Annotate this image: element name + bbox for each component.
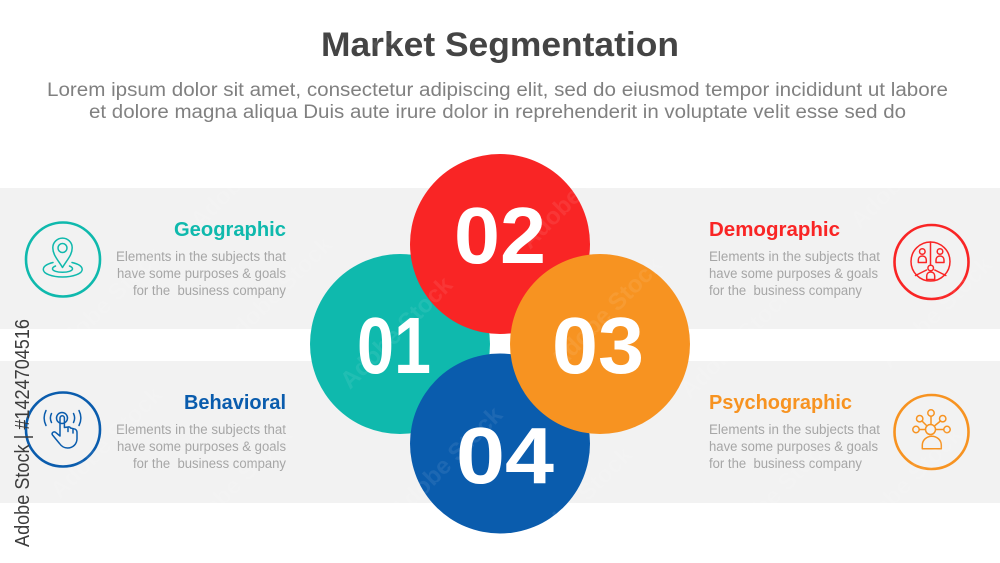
description: Geographic: have some purposes & goals: [117, 266, 286, 281]
panel: geographic: [26, 219, 286, 298]
description: Psychographic: Elements in the subjects that: [709, 422, 880, 437]
description: Behavioral: [116, 422, 286, 471]
watermark pattern: Adobe Stock: [845, 111, 968, 234]
icon: map pin: [26, 222, 100, 296]
description: Geographic: [116, 249, 286, 298]
description: Psychographic: have some purposes & goals: [709, 439, 878, 454]
circle 04: 04: [456, 411, 555, 500]
panel: demographic: [709, 219, 968, 299]
icon: people segments: [894, 225, 968, 299]
description: Demographic: have some purposes & goals: [709, 266, 878, 281]
panel: psychographic: [709, 392, 968, 471]
subtitle text: et dolore magna aliqua Duis aute irure dolor in reprehenderit in voluptate velit esse sed do: [89, 102, 906, 123]
watermark pattern: Adobe Stock: [515, 441, 638, 563]
watermark pattern: Adobe Stock: [515, 131, 638, 254]
description: Demographic: for the business company: [709, 283, 862, 298]
watermark pattern: Adobe Stock: [335, 271, 458, 394]
top background band: [0, 188, 1000, 329]
subtitle text: [47, 80, 948, 123]
description: Behavioral: Elements in the subjects that: [116, 422, 286, 437]
circle 03: 03: [552, 301, 644, 390]
circle 02: [410, 154, 590, 334]
watermark pattern: Adobe Stock: [175, 421, 298, 544]
circle 03: [510, 254, 690, 434]
watermark pattern: Adobe Stock: [375, 71, 498, 194]
watermark pattern: Adobe Stock: [185, 111, 308, 234]
watermark pattern: Adobe Stock: [715, 431, 838, 554]
watermark pattern: Adobe Stock: [215, 231, 338, 354]
circle 01: 01: [357, 301, 431, 390]
watermark pattern: Adobe Stock: [845, 421, 968, 544]
watermark pattern: Adobe Stock: [545, 251, 668, 374]
watermark pattern: Adobe Stock: [45, 241, 168, 364]
panel: behavioral: [26, 392, 286, 471]
heading: Geographic: Geographic: [174, 219, 286, 241]
description: Behavioral: have some purposes & goals: [117, 439, 286, 454]
heading: Behavioral: Behavioral: [184, 392, 286, 414]
watermark pattern: Adobe Stock: [705, 71, 828, 194]
circle 02: 02: [454, 191, 546, 280]
description: Psychographic: [709, 422, 880, 471]
watermark pattern: Adobe Stock: [875, 251, 998, 374]
title: Market Segmentation: [321, 26, 679, 64]
stock id side label: Adobe Stock | #1424704516: [12, 319, 34, 547]
icon: mind network: [894, 395, 968, 469]
watermark pattern: Adobe Stock: [385, 401, 508, 524]
heading: Psychographic: Psychographic: [709, 392, 852, 414]
heading: Demographic: Demographic: [709, 219, 840, 241]
description: Psychographic: for the business company: [709, 456, 862, 471]
description: Geographic: Elements in the subjects that: [116, 249, 286, 264]
subtitle text: Lorem ipsum dolor sit amet, consectetur adipiscing elit, sed do eiusmod tempor incididunt ut labore: [47, 80, 948, 101]
description: Demographic: [709, 249, 880, 298]
circle 04: [410, 354, 590, 534]
watermark pattern: Adobe Stock: [45, 381, 168, 504]
circle 01: [310, 254, 490, 434]
icon: tapping hand: [26, 392, 100, 466]
watermark pattern: Adobe Stock: [675, 281, 798, 404]
bottom background band: [0, 361, 1000, 503]
watermark pattern: Adobe Stock: [45, 61, 168, 184]
description: Demographic: Elements in the subjects that: [709, 249, 880, 264]
description: Behavioral: for the business company: [133, 456, 286, 471]
description: Geographic: for the business company: [133, 283, 286, 298]
